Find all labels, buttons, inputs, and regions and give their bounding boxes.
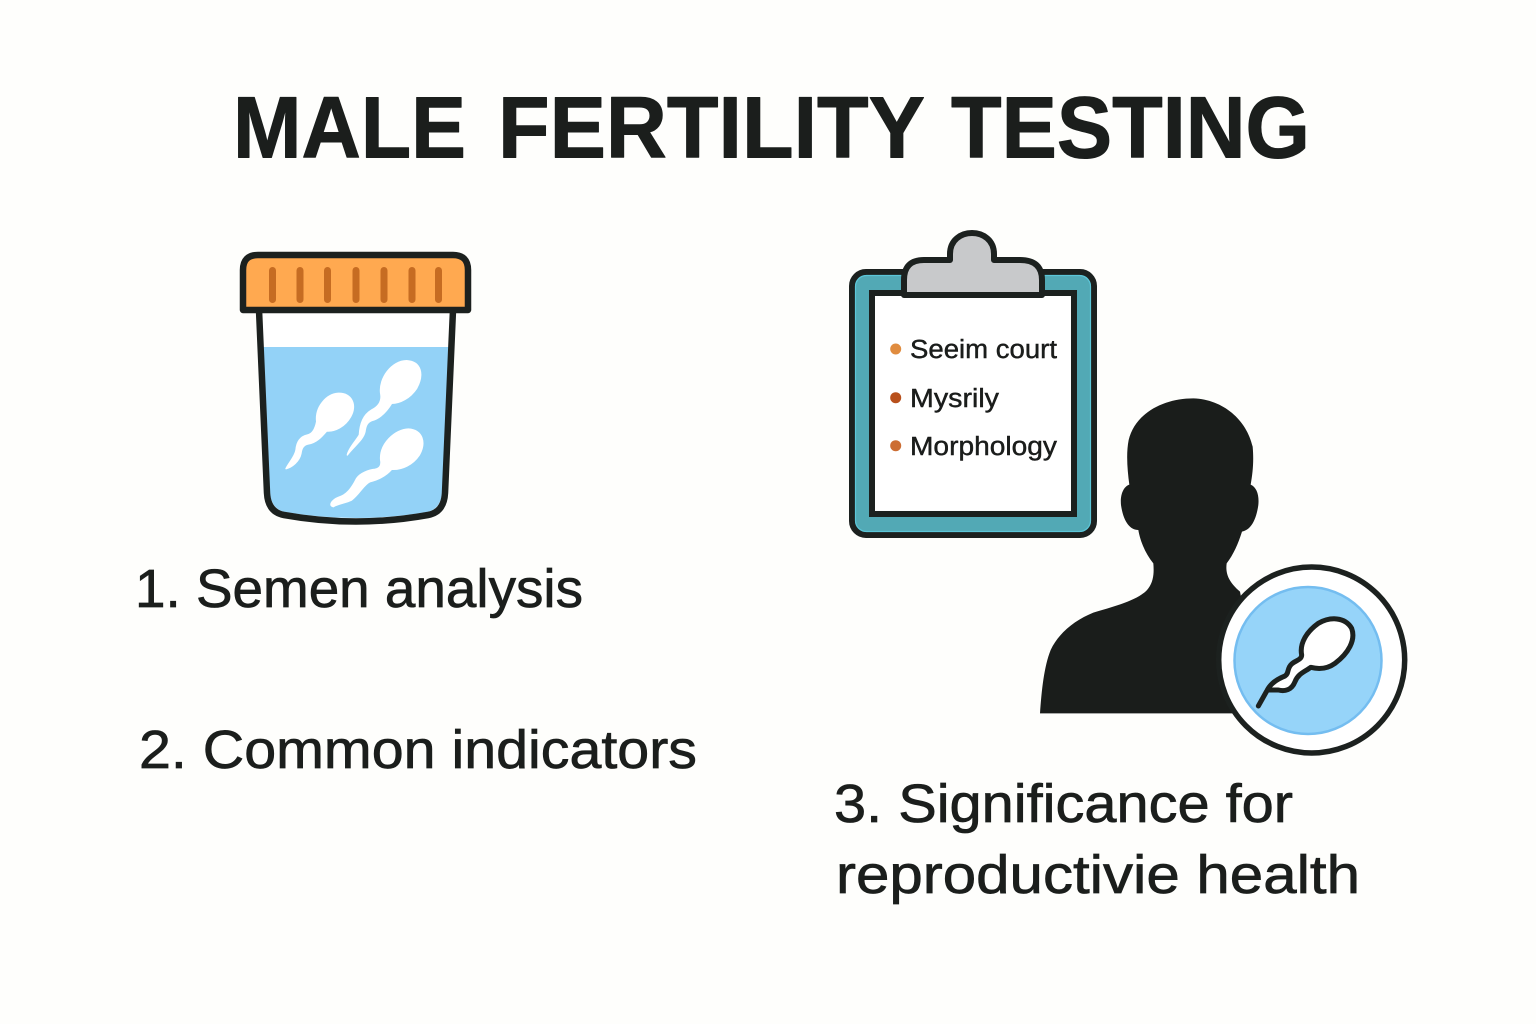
panel: semen analysis xyxy=(135,255,583,619)
list item: mysrily: Mysrily xyxy=(910,385,999,413)
panel: reproductive health xyxy=(834,398,1405,905)
icon: specimen cup xyxy=(243,255,468,522)
lid ribs xyxy=(269,267,442,303)
title: FERTILITY xyxy=(498,80,925,176)
heading: common indicators: 2. Common indicators xyxy=(139,720,697,780)
icon: sperm outline xyxy=(1258,619,1353,706)
heading: significance for reproductive health: 3. Significance for xyxy=(834,774,1293,834)
title: TESTING xyxy=(951,80,1310,176)
clipboard board xyxy=(852,272,1094,535)
title xyxy=(233,80,1310,176)
icon: male silhouette xyxy=(1040,398,1263,713)
heading: significance for reproductive health xyxy=(834,774,1360,905)
title: MALE xyxy=(233,80,466,176)
cup lid xyxy=(243,255,468,310)
panel: clipboard of indicators xyxy=(852,233,1094,535)
icon: sperm in cup xyxy=(286,361,423,507)
heading: semen analysis: 1. Semen analysis xyxy=(135,559,583,619)
list item: seeim court: Seeim court xyxy=(910,336,1057,364)
cup outline xyxy=(259,310,453,522)
icon: magnified sperm badge xyxy=(1219,567,1405,753)
clipboard paper xyxy=(872,293,1074,514)
heading: significance for reproductive health: reproductivie health xyxy=(836,845,1360,905)
cup body xyxy=(259,310,453,522)
clipboard edge highlight xyxy=(856,276,1090,532)
clipboard clip xyxy=(904,233,1042,295)
cup liquid xyxy=(262,347,450,518)
list item: morphology: Morphology xyxy=(910,433,1057,461)
